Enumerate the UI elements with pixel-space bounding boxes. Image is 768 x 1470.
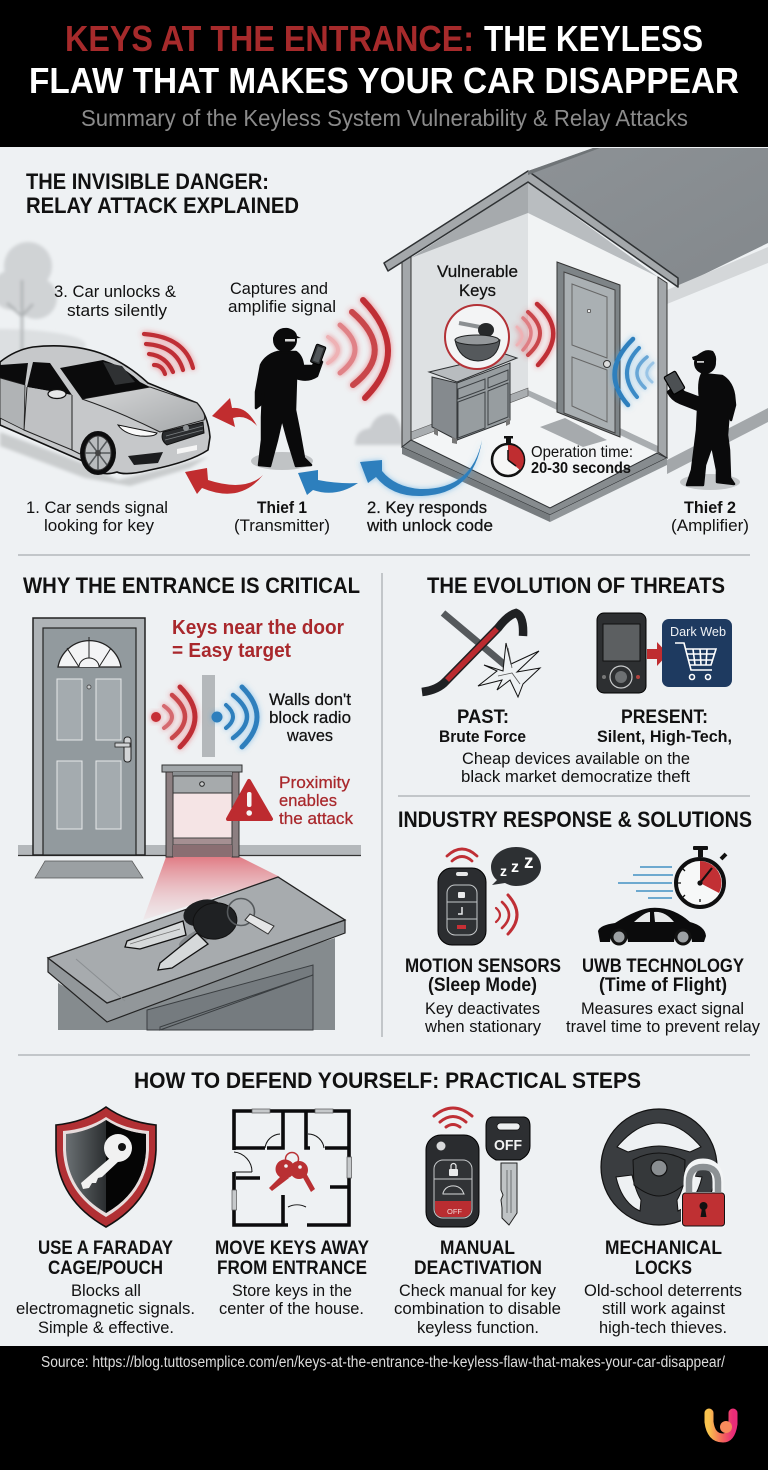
step: faraday text: USE A FARADAY	[38, 1238, 173, 1259]
label: captures	[228, 279, 336, 316]
handle	[124, 737, 131, 762]
heading: why the entrance: WHY THE ENTRANCE IS CRITICAL	[23, 573, 360, 598]
label: thief 1: Thief 1	[257, 498, 307, 517]
step: mechanical locks text: MECHANICAL	[605, 1238, 722, 1259]
arrow	[647, 642, 668, 666]
title	[29, 18, 739, 101]
thief 1 silhouette	[251, 328, 326, 470]
road band	[667, 408, 768, 474]
label: motion sensors	[405, 956, 561, 1036]
icon: key fob sleep mode: z	[524, 852, 534, 873]
heading: keys near door	[172, 616, 344, 662]
label: uwb technology: Measures exact signal	[581, 999, 744, 1018]
step: move keys text: FROM ENTRANCE	[217, 1258, 367, 1279]
label: proximity: Proximity	[279, 773, 350, 792]
label: thief 2	[671, 498, 749, 535]
door mat	[35, 861, 143, 878]
signal waves at door: blue	[615, 339, 653, 405]
panel: how to defend yourself	[16, 1068, 742, 1337]
arrow: blue return 1	[298, 470, 358, 495]
text: cheap devices	[461, 749, 690, 786]
icon: device and dark web	[597, 613, 732, 693]
panel: evolution of threats	[422, 573, 732, 786]
arrow: blue return 2	[360, 440, 482, 496]
step: mechanical locks text	[584, 1238, 742, 1337]
door mat	[540, 418, 607, 447]
label: present: PRESENT:	[621, 707, 708, 728]
stopwatch	[492, 436, 524, 476]
label: operation time: 20-30 seconds	[531, 460, 631, 477]
label: key responds: with unlock code	[366, 516, 493, 535]
label: key responds: 2. Key responds	[367, 498, 487, 517]
label: past	[439, 707, 526, 746]
house	[384, 148, 768, 522]
label: operation time: Operation time:	[531, 444, 633, 461]
title: KEYS AT THE ENTRANCE:	[65, 18, 474, 59]
label: walls don't block: block radio	[269, 708, 351, 727]
label: thief 1	[234, 498, 330, 535]
label: thief 2: (Amplifier)	[671, 516, 749, 535]
heading: how to defend: HOW TO DEFEND YOURSELF: PRACTICAL STEPS	[134, 1068, 641, 1093]
label: past: PAST:	[457, 707, 509, 728]
arrow: signal to car	[185, 468, 263, 494]
step: mechanical locks text: still work against	[602, 1299, 725, 1318]
heading: keys near door: Keys near the door	[172, 616, 344, 639]
left wall interior	[411, 213, 528, 437]
step: move keys text: MOVE KEYS AWAY	[215, 1238, 369, 1259]
step: faraday text: Blocks all	[71, 1281, 141, 1300]
ignition key: OFF	[494, 1137, 522, 1154]
step: mechanical locks text: LOCKS	[635, 1258, 692, 1279]
label: present: Silent, High-Tech,	[597, 727, 732, 746]
amplified signal waves	[328, 300, 388, 398]
wheel	[80, 431, 116, 475]
label: walls don't block: Walls don't	[269, 690, 351, 709]
label: thief 1: (Transmitter)	[234, 516, 330, 535]
red keys	[269, 1152, 315, 1192]
step: faraday text: CAGE/POUCH	[48, 1258, 163, 1279]
phone	[310, 344, 326, 365]
slab	[402, 440, 667, 515]
tablet	[664, 371, 685, 395]
door	[557, 262, 620, 437]
icon: faraday shield	[56, 1107, 156, 1227]
padlock	[681, 1164, 726, 1228]
skirting	[528, 390, 557, 410]
back wall interior	[528, 213, 658, 450]
step: mechanical locks text: Old-school deterrents	[584, 1281, 742, 1300]
footer	[0, 1346, 768, 1470]
grille	[162, 422, 204, 445]
wall posts	[402, 256, 411, 447]
baseboard	[18, 845, 361, 856]
icon: crowbar and broken glass	[422, 613, 540, 697]
icon: floor plan with keys	[232, 1109, 352, 1225]
step: manual deactivation text: combination to disable	[394, 1299, 561, 1318]
label: vulnerable keys: Vulnerable	[437, 262, 518, 281]
text: cheap devices: Cheap devices available on the	[462, 749, 690, 768]
cabinet with keys	[429, 305, 517, 444]
label: past: Brute Force	[439, 727, 526, 746]
waves through wall	[151, 687, 257, 747]
text: cheap devices: black market democratize theft	[461, 767, 690, 786]
arrow: car signal to thief 1	[212, 398, 257, 427]
car	[0, 346, 210, 486]
label: walls don't block	[269, 690, 351, 745]
icon: device and dark web: Dark Web	[670, 624, 726, 639]
thief 2 silhouette	[664, 350, 740, 490]
label: thief 2: Thief 2	[684, 498, 736, 517]
heading: invisible danger: THE INVISIBLE DANGER:	[26, 169, 269, 194]
label: proximity	[279, 773, 353, 828]
panel: relay attack explained	[0, 148, 768, 535]
label: uwb technology	[566, 956, 760, 1036]
icon: manual deactivation fob and key	[426, 1108, 530, 1227]
signal waves inside house: red	[517, 304, 553, 365]
icon: key fob sleep mode: z	[511, 859, 519, 876]
label: car unlocks: 3. Car unlocks &	[54, 282, 177, 301]
subtitle: Summary of the Keyless System Vulnerability & Relay Attacks	[81, 105, 688, 131]
counter with keys	[48, 877, 345, 1030]
label: motion sensors: MOTION SENSORS	[405, 956, 561, 977]
floor	[411, 395, 657, 508]
step: move keys text: center of the house.	[219, 1299, 364, 1318]
icon: steering wheel with padlock	[601, 1109, 726, 1228]
label: proximity: enables	[279, 791, 337, 810]
heading: invisible danger: RELAY ATTACK EXPLAINED	[26, 193, 299, 218]
label: uwb technology: UWB TECHNOLOGY	[582, 956, 744, 977]
label: present	[597, 707, 732, 746]
step: faraday text	[16, 1238, 195, 1337]
keys on counter	[125, 895, 274, 970]
heading: keys near door: = Easy target	[172, 639, 291, 662]
step: manual deactivation text: Check manual for key	[399, 1281, 556, 1300]
label: uwb technology: (Time of Flight)	[599, 975, 727, 996]
label: uwb technology: travel time to prevent relay	[566, 1017, 760, 1036]
right roof	[528, 148, 768, 287]
label: car unlocks	[54, 282, 177, 320]
label: car unlocks: starts silently	[67, 301, 168, 320]
header banner	[0, 0, 768, 147]
fanlight	[58, 641, 121, 667]
step: manual deactivation text: keyless function.	[417, 1318, 539, 1337]
waves	[496, 895, 517, 934]
door	[33, 618, 145, 855]
icon: stopwatch and car	[598, 846, 726, 946]
headlight	[118, 425, 157, 436]
label: walls don't block: waves	[286, 726, 333, 745]
title: THE KEYLESS	[484, 18, 703, 59]
step: faraday text: Simple & effective.	[38, 1318, 174, 1337]
step: mechanical locks text: high-tech thieves.	[599, 1318, 727, 1337]
wall section	[202, 675, 215, 757]
label: car sends signal: 1. Car sends signal	[26, 498, 168, 517]
beam of light from table to counter	[143, 857, 280, 920]
label: captures: Captures and	[230, 279, 328, 298]
icon: manual deactivation fob and key: OFF	[447, 1207, 462, 1216]
label: motion sensors: when stationary	[424, 1017, 541, 1036]
background tree and bushes	[0, 242, 405, 445]
gable band	[384, 171, 678, 287]
label: motion sensors: Key deactivates	[425, 999, 540, 1018]
icon: key fob sleep mode: z	[500, 863, 507, 879]
step: move keys text	[215, 1238, 369, 1318]
label: operation time	[531, 444, 633, 477]
icon: warning triangle	[228, 781, 271, 819]
logo	[709, 1413, 733, 1438]
signal waves above car	[144, 334, 193, 374]
label: key responds	[366, 498, 493, 535]
panel: why the entrance is critical	[18, 573, 361, 1030]
cart	[675, 643, 716, 680]
heading: invisible danger	[26, 169, 299, 218]
label: proximity: the attack	[279, 809, 353, 828]
label: car sends signal: looking for key	[44, 516, 154, 535]
ceiling shadow	[411, 182, 528, 258]
label: captures: amplifie signal	[228, 297, 336, 316]
step: manual deactivation text: MANUAL	[440, 1238, 515, 1259]
hall table	[162, 765, 242, 857]
label: vulnerable keys	[437, 262, 518, 300]
lower vent and plate	[128, 452, 163, 465]
icon: bowl of keys circle	[445, 305, 509, 369]
step: manual deactivation text: DEACTIVATION	[414, 1258, 542, 1279]
icon: key fob sleep mode	[438, 847, 541, 945]
label: vulnerable keys: Keys	[459, 281, 496, 300]
label: car sends signal	[26, 498, 168, 535]
step: manual deactivation text	[394, 1238, 561, 1337]
panel: industry response	[398, 807, 760, 1036]
step: move keys text: Store keys in the	[232, 1281, 352, 1300]
speech bubble	[491, 847, 541, 886]
mirror	[48, 390, 66, 398]
label: motion sensors: (Sleep Mode)	[428, 975, 537, 996]
step: faraday text: electromagnetic signals.	[16, 1299, 195, 1318]
heading: evolution: THE EVOLUTION OF THREATS	[427, 573, 725, 598]
